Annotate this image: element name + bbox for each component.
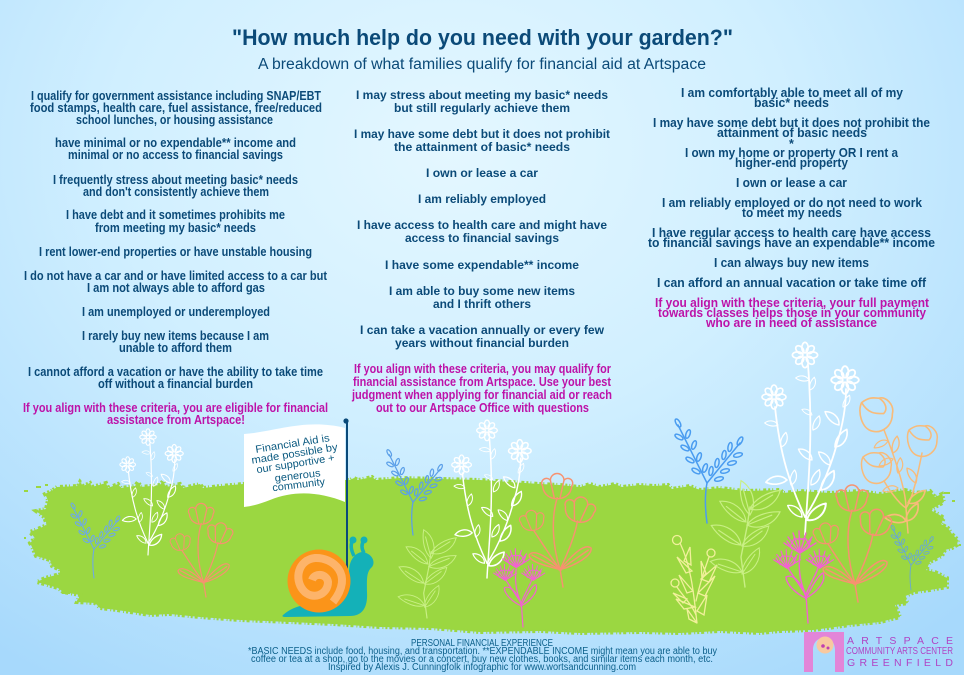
column 3: full payment criteria: *	[789, 137, 794, 151]
column 3: full payment criteria: to financial savings have an expendable** income	[648, 236, 935, 250]
column 3: full payment criteria: I am reliably employed or do not need to work	[662, 196, 922, 210]
logo: Artspace Community Arts Center Greenfield	[804, 632, 953, 672]
column 2: may qualify criteria: judgment when applying for financial aid or reach	[351, 388, 612, 402]
footer notes: Inspired by Alexis J. Cunningfolk infographic for www.wortsandcunning.com	[328, 662, 636, 673]
flag on pole: our supportive +	[256, 452, 335, 476]
column 1: eligible criteria: I do not have a car and or have limited access to a car but	[24, 269, 328, 283]
illustration: orange tulips	[860, 398, 937, 533]
column 2: may qualify criteria: I have access to health care and might have	[357, 218, 607, 232]
column 1: eligible criteria: and don't consistently achieve them	[83, 185, 269, 199]
column 1: eligible criteria: If you align with these criteria, you are eligible for financial	[23, 401, 328, 415]
column 2: may qualify criteria: If you align with these criteria, you may qualify for	[354, 362, 611, 376]
column 3: full payment criteria: I own or lease a car	[736, 176, 847, 190]
column 3: full payment criteria: I can always buy new items	[714, 256, 869, 270]
column 1: eligible criteria: unable to afford them	[119, 341, 232, 355]
footer notes	[248, 638, 717, 673]
column 1: eligible criteria: school lunches, or housing assistance	[76, 113, 273, 127]
footer notes: PERSONAL FINANCIAL EXPERIENCE	[411, 638, 553, 649]
column 2: may qualify criteria: access to financial savings	[405, 231, 559, 245]
column 3: full payment criteria: basic* needs	[754, 96, 829, 110]
illustration: small muted lavender right	[891, 525, 934, 590]
column 3: full payment criteria: I may have some debt but it does not prohibit the	[653, 116, 930, 130]
illustration: tall white wildflowers	[762, 342, 859, 535]
column 2: may qualify criteria: years without financial burden	[395, 336, 569, 350]
illustration: medium white wildflowers	[452, 420, 531, 578]
column 1: eligible criteria: I am not always able to afford gas	[87, 281, 265, 295]
column 1: eligible criteria: I frequently stress about meeting basic* needs	[53, 173, 298, 187]
column 2: may qualify criteria: I may stress about meeting my basic* needs	[356, 88, 608, 102]
column 1: eligible criteria: food stamps, health care, fuel assistance, free/reduced	[30, 101, 322, 115]
flag on pole: Financial Aid is	[255, 432, 331, 456]
column 2: may qualify criteria: and I thrift others	[433, 297, 531, 311]
column 1: eligible criteria: I qualify for government assistance including SNAP/EBT	[31, 89, 321, 103]
illustration: pink burst flower right	[773, 531, 834, 623]
column 1: eligible criteria: assistance from Artspace!	[107, 413, 245, 427]
column 2: may qualify criteria: out to our Artspace Office with questions	[376, 401, 589, 415]
green painted brushstroke ground	[24, 477, 961, 633]
illustration: yellow sprig	[671, 536, 717, 623]
illustration: pale green leafy plant left	[398, 530, 459, 618]
logo: Artspace Community Arts Center Greenfield: ARTSPACE	[847, 635, 953, 647]
column 1: eligible criteria: off without a financial burden	[98, 377, 253, 391]
flag on pole: generous	[274, 467, 321, 485]
column 3: full payment criteria: I am comfortably able to meet all of my	[681, 86, 903, 100]
column 1: eligible criteria: minimal or no access to financial savings	[68, 148, 283, 162]
illustration: blue lavender right	[674, 418, 744, 523]
column 2: may qualify criteria	[351, 88, 612, 415]
footer notes: *BASIC NEEDS include food, housing, and transportation. **EXPENDABLE INCOME might mean you are able to buy	[248, 646, 717, 657]
logo: Artspace Community Arts Center Greenfield: GREENFIELD	[847, 657, 953, 669]
column 2: may qualify criteria: I may have some debt but it does not prohibit	[354, 127, 610, 141]
illustration: blue lavender left	[70, 502, 121, 578]
column 1: eligible criteria: I rarely buy new items because I am	[82, 329, 269, 343]
column 2: may qualify criteria: financial assistance from Artspace. Use your best	[353, 375, 612, 389]
subtitle: A breakdown of what families qualify for financial aid at Artspace	[258, 56, 706, 73]
column 2: may qualify criteria: I am reliably employed	[418, 192, 546, 206]
column 2: may qualify criteria: the attainment of basic* needs	[394, 140, 570, 154]
column 1: eligible criteria	[23, 89, 328, 427]
column 1: eligible criteria: I have debt and it sometimes prohibits me	[66, 208, 285, 222]
column 3: full payment criteria: I can afford an annual vacation or take time off	[657, 276, 927, 290]
footer notes: coffee or tea at a shop, go to the movies or a concert, buy new clothes, books, and similar items each month, etc.	[251, 654, 713, 665]
column 1: eligible criteria: I rent lower-end properties or have unstable housing	[39, 245, 312, 259]
illustration: coral flower right	[812, 485, 894, 602]
column 3: full payment criteria: If you align with these criteria, your full payment	[655, 296, 930, 310]
column 2: may qualify criteria: I have some expendable** income	[385, 258, 579, 272]
column 3: full payment criteria: attainment of basic needs	[717, 126, 867, 140]
column 3: full payment criteria: higher-end property	[735, 156, 848, 170]
column 3: full payment criteria	[648, 86, 935, 330]
column 2: may qualify criteria: I own or lease a car	[426, 166, 538, 180]
flag on pole: made possible by	[251, 441, 339, 467]
flag on pole: community	[272, 476, 326, 494]
illustration: coral flower left	[169, 503, 234, 597]
snail	[282, 536, 374, 617]
illustration: pale green leafy plant right	[710, 481, 784, 587]
column 1: eligible criteria: I cannot afford a vacation or have the ability to take time	[28, 365, 323, 379]
column 3: full payment criteria: towards classes helps those in your community	[658, 306, 926, 320]
column 2: may qualify criteria: I am able to buy some new items	[389, 284, 575, 298]
illustration: blue lavender centre	[386, 449, 443, 535]
column 2: may qualify criteria: I can take a vacation annually or every few	[360, 323, 605, 337]
column 1: eligible criteria: have minimal or no expendable** income and	[55, 136, 296, 150]
column 1: eligible criteria: I am unemployed or underemployed	[82, 305, 270, 319]
illustration: coral flower centre	[518, 474, 598, 587]
column 3: full payment criteria: I have regular access to health care have access	[652, 226, 931, 240]
illustration: small white wildflowers	[120, 429, 183, 555]
column 3: full payment criteria: who are in need of assistance	[705, 316, 877, 330]
column 3: full payment criteria: to meet my needs	[742, 206, 842, 220]
title: "How much help do you need with your garden?"	[232, 25, 733, 50]
illustration: pink burst flower centre	[494, 549, 545, 627]
column 3: full payment criteria: I own my home or property OR I rent a	[685, 146, 899, 160]
flag on pole	[244, 418, 349, 572]
column 1: eligible criteria: from meeting my basic* needs	[95, 221, 256, 235]
column 2: may qualify criteria: but still regularly achieve them	[394, 101, 570, 115]
